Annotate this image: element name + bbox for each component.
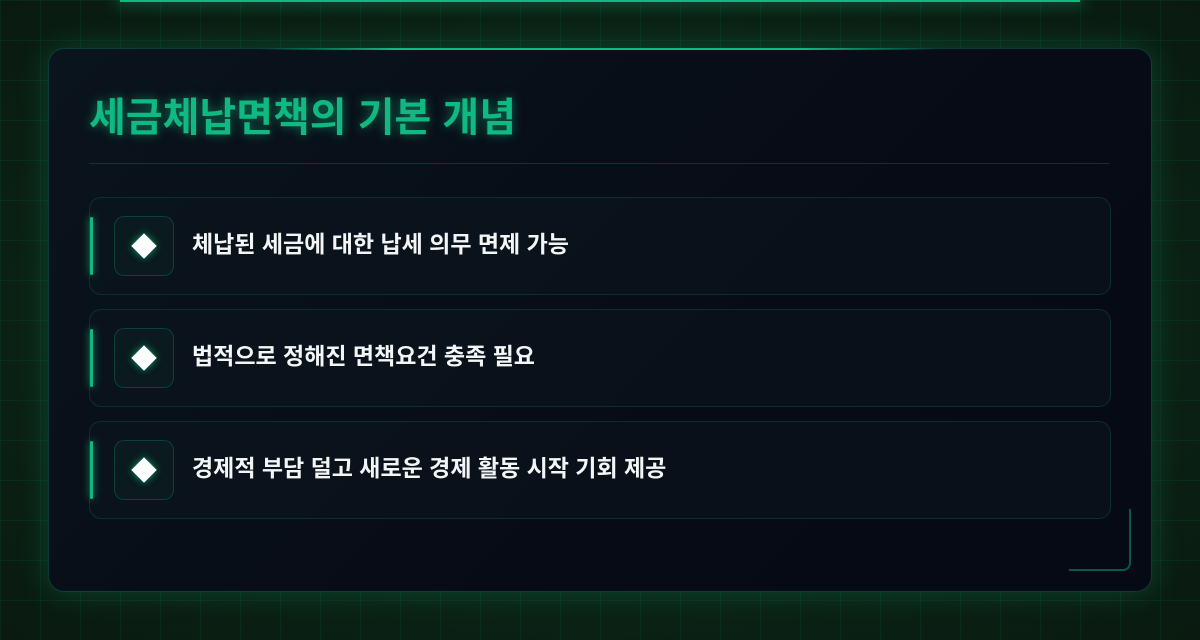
text 2: 법적으로 정해진 면책요건 충족 필요 — [192, 343, 535, 369]
icon: diamond — [114, 440, 174, 500]
item 1 — [89, 197, 1111, 295]
corner bracket — [1069, 509, 1131, 571]
title: 세금체납면책의 기본 개념 — [89, 96, 516, 140]
icon: diamond — [114, 216, 174, 276]
icon: diamond — [114, 328, 174, 388]
panel: main card — [48, 48, 1152, 592]
text 3: 경제적 부담 덜고 새로운 경제 활동 시작 기회 제공 — [192, 455, 666, 481]
item 3 — [89, 421, 1111, 519]
text 1: 체납된 세금에 대한 납세 의무 면제 가능 — [192, 231, 569, 257]
top glow line — [120, 0, 1080, 2]
item 2 — [89, 309, 1111, 407]
